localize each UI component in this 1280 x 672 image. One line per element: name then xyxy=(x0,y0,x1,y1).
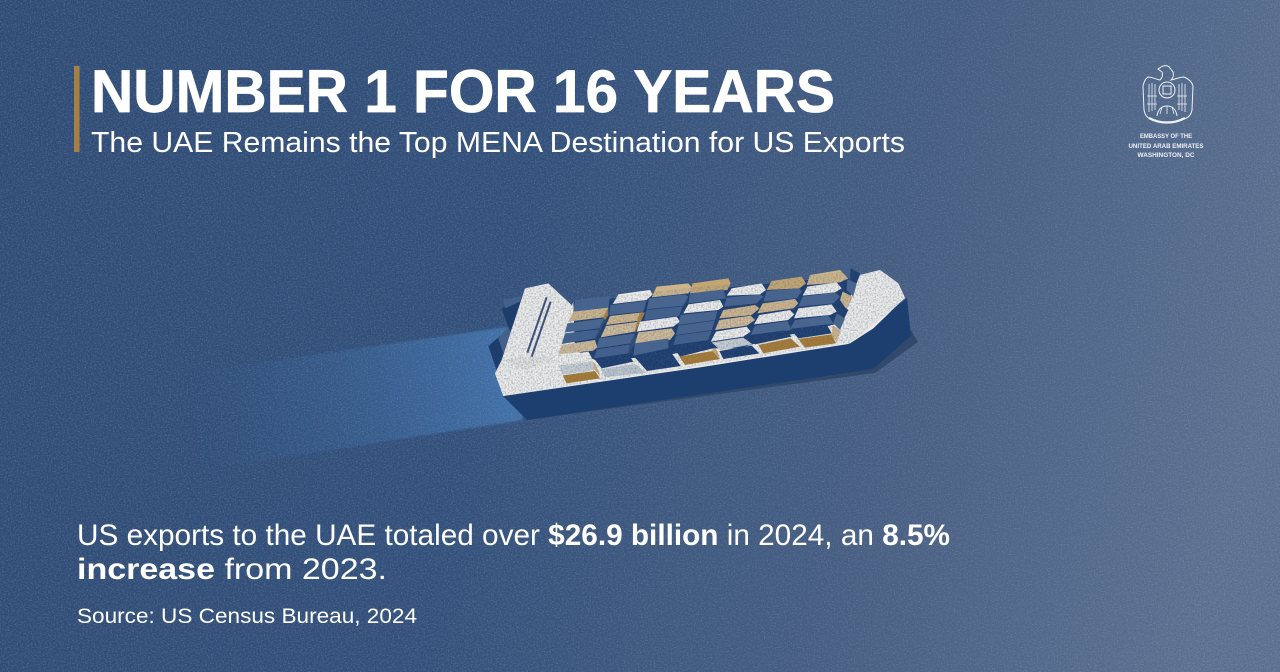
ship wake xyxy=(170,327,523,470)
title: NUMBER 1 FOR 16 YEARS xyxy=(91,58,835,125)
embassy emblem xyxy=(1143,66,1193,122)
hull xyxy=(503,298,911,420)
ship grain xyxy=(496,270,905,396)
superstructure xyxy=(495,283,573,396)
cargo bay floor xyxy=(573,275,860,360)
deck base xyxy=(495,270,905,396)
embassy label: WASHINGTON, DC xyxy=(1138,152,1195,159)
container column 1 xyxy=(554,296,610,383)
falcon head and wings outline xyxy=(1143,66,1193,119)
container column 3 xyxy=(633,283,693,371)
bow deck xyxy=(838,270,905,344)
hull shadow xyxy=(527,330,918,420)
body statement xyxy=(77,519,950,586)
source note: Source: US Census Bureau, 2024 xyxy=(77,605,417,628)
container column 2 xyxy=(594,290,653,377)
container column 4 xyxy=(672,278,731,365)
subtitle: The UAE Remains the Top MENA Destination for US Exports xyxy=(91,127,905,159)
superstructure window lines xyxy=(527,297,551,357)
container ship illustration xyxy=(480,260,920,430)
embassy label xyxy=(1128,133,1204,159)
body statement: US exports to the UAE totaled over $26.9 billion in 2024, an 8.5% xyxy=(77,519,950,552)
container column 5 xyxy=(711,283,766,359)
container column 7 xyxy=(790,270,848,348)
embassy label: EMBASSY OF THE xyxy=(1140,133,1193,140)
container end faces xyxy=(832,260,860,342)
stern shapes behind superstructure xyxy=(488,296,527,371)
embassy label: UNITED ARAB EMIRATES xyxy=(1128,143,1204,150)
gold accent bar xyxy=(74,66,80,152)
container column 6 xyxy=(751,277,806,353)
body statement: increase from 2023. xyxy=(77,553,387,586)
